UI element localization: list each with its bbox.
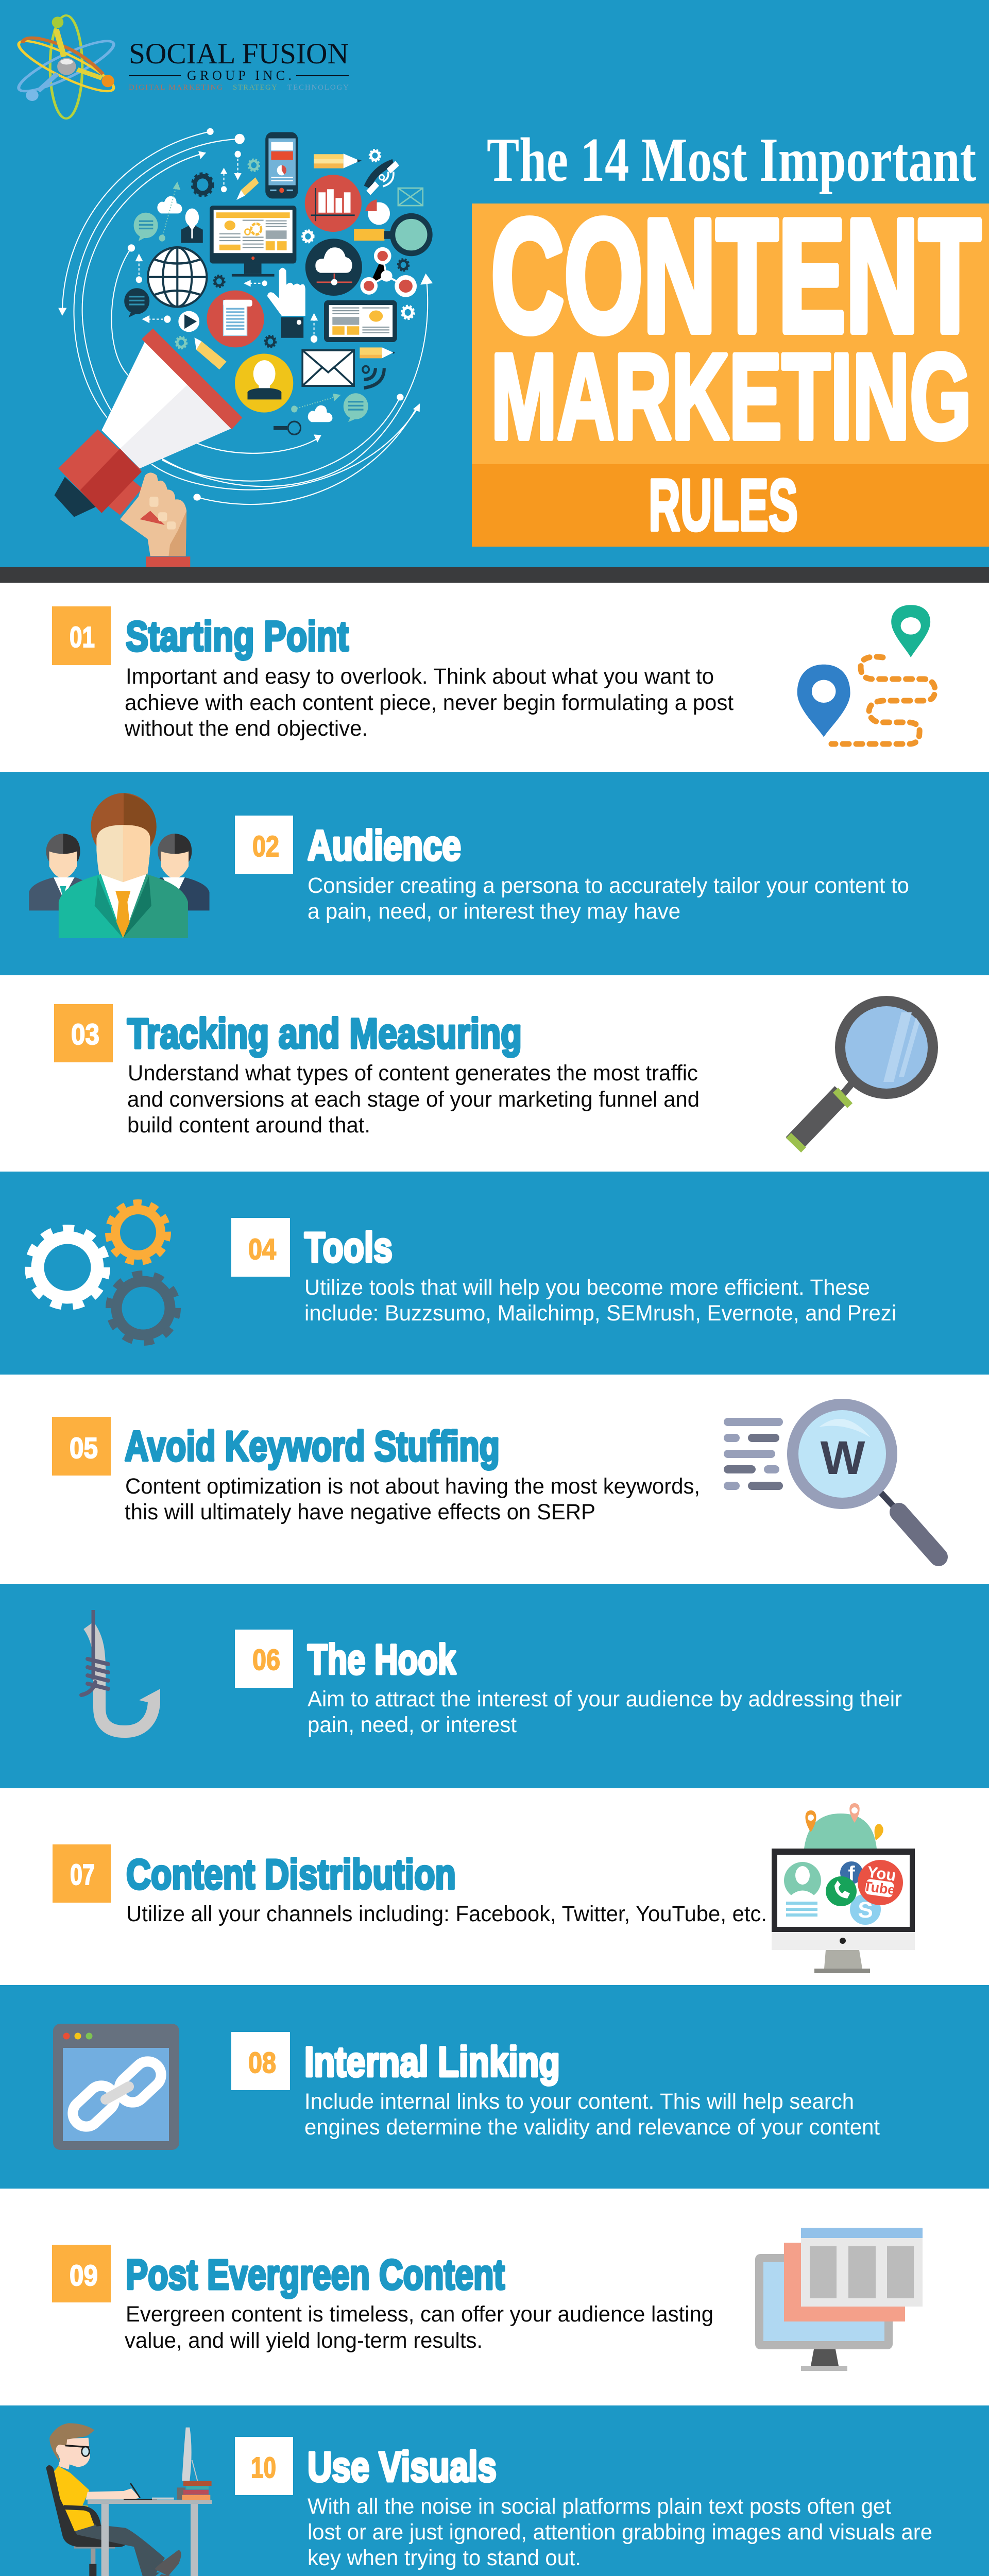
icon: clouds: [157, 196, 332, 422]
panel: rule 03 tracking and measuring: and conversions at each stage of your marketing funnel and: [127, 1087, 700, 1112]
panel: rule 07 content distribution: [0, 1788, 989, 1985]
panel: rule 06 the hook: 06: [252, 1643, 280, 1676]
panel: rule 10 use visuals: key when trying to stand out.: [308, 2546, 581, 2570]
icon: globe: [148, 247, 207, 307]
icon: outline envelope: [398, 188, 423, 206]
icon: magnifying glass: [354, 216, 430, 253]
panel: rule 06 the hook: The Hook: [308, 1636, 456, 1683]
icon: hand holding megaphone: [120, 472, 190, 567]
icon: network nodes: [360, 247, 417, 297]
panel: rule 04 tools: Tools: [304, 1224, 393, 1271]
icon: small magnifier: [274, 421, 301, 434]
title box: [472, 187, 989, 547]
icon: speech bubbles: [124, 213, 368, 422]
icon: gears: [176, 149, 414, 349]
logo: Social Fusion Group: GROUP INC.: [187, 68, 292, 83]
panel: rule 10 use visuals: Use Visuals: [308, 2444, 497, 2490]
panel: rule 02 audience: a pain, need, or interest they may have: [308, 899, 680, 924]
panel: rule 01 starting point: Starting Point: [126, 613, 349, 660]
panel: rule 04 tools: 04: [248, 1233, 276, 1266]
panel: rule 02 audience: [0, 772, 989, 975]
panel: rule 10 use visuals: 10: [251, 2451, 276, 2484]
panel: rule 09 post evergreen content: Evergreen content is timeless, can offer your audience lasting: [126, 2302, 713, 2327]
panel: rule 06 the hook: Aim to attract the interest of your audience by addressing their: [308, 1687, 902, 1711]
panel: rule 03 tracking and measuring: build content around that.: [127, 1113, 370, 1138]
panel: rule 07 content distribution: Utilize all your channels including: Facebook, Twitter, YouTube, etc.: [126, 1902, 767, 1926]
panel: rule 08 internal linking: engines determine the validity and relevance of your content: [304, 2115, 880, 2140]
icon: magnifying glass: [789, 1001, 933, 1150]
icon: small pencil: [360, 347, 395, 358]
panel: header: [0, 0, 989, 567]
panel: rule 05 avoid keyword stuffing: Avoid Keyword Stuffing: [125, 1423, 500, 1470]
panel: rule 06 the hook: [0, 1584, 989, 1788]
panel: rule 03 tracking and measuring: 03: [71, 1018, 99, 1051]
panel: rule 09 post evergreen content: Post Evergreen Content: [126, 2251, 505, 2298]
panel: rule 08 internal linking: [0, 1985, 989, 2189]
panel: rule 03 tracking and measuring: [0, 975, 989, 1172]
icon: monitor with social apps: [772, 1803, 915, 1973]
panel: rule 01 starting point: Important and easy to overlook. Think about what you want to: [126, 664, 714, 689]
icon: keyword magnifier: [724, 1404, 939, 1557]
icon: document circle: [207, 291, 264, 347]
icon: dashed arrows: [135, 151, 341, 413]
logo: Social Fusion Group: SOCIAL FUSION: [129, 38, 349, 70]
icon: phone: [265, 132, 298, 198]
icon: browser window with chain link: [53, 2024, 179, 2150]
panel: rule 06 the hook: pain, need, or interest: [308, 1713, 517, 1737]
icon: gears: [29, 1203, 177, 1342]
icon: map pins and route: [797, 605, 935, 744]
panel: rule 10 use visuals: lost or are just ignored, attention grabbing images and visuals are: [308, 2520, 932, 2545]
icon: audience people: [29, 793, 210, 938]
panel: rule 01 starting point: [0, 583, 989, 772]
panel: rule 09 post evergreen content: [0, 2189, 989, 2405]
panel: rule 01 starting point: 01: [70, 621, 95, 654]
logo: Social Fusion Group: [12, 15, 349, 118]
panel: rule 05 avoid keyword stuffing: Content optimization is not about having the most keywords,: [125, 1474, 700, 1499]
icon: pencil diagonal: [194, 177, 259, 369]
logo: Social Fusion Group: TECHNOLOGY: [287, 83, 349, 92]
icon: monitor with social apps: S: [858, 1897, 873, 1923]
panel: rule 02 audience: 02: [252, 830, 279, 863]
panel: rule 04 tools: Utilize tools that will help you become more efficient. These: [304, 1275, 870, 1300]
logo: Social Fusion Group: STRATEGY: [233, 83, 277, 92]
panel: rule 03 tracking and measuring: Tracking and Measuring: [127, 1010, 522, 1057]
panel: rule 01 starting point: without the end objective.: [124, 716, 368, 741]
panel: rule 05 avoid keyword stuffing: [0, 1375, 989, 1584]
icon: person circle: [235, 353, 293, 413]
panel: rule 03 tracking and measuring: Understand what types of content generates the most traffic: [128, 1061, 698, 1086]
panel: rule 04 tools: [0, 1172, 989, 1375]
panel: rule 09 post evergreen content: 09: [70, 2259, 98, 2292]
logo: Social Fusion Group: DIGITAL MARKETING: [129, 83, 223, 92]
icon: monitor and stacked pages: [755, 2228, 923, 2371]
panel: rule 10 use visuals: With all the noise in social platforms plain text posts often get: [308, 2494, 891, 2519]
icon: monitor with social apps: You: [866, 1862, 897, 1885]
panel: rule 05 avoid keyword stuffing: this will ultimately have negative effects on SERP: [125, 1500, 595, 1524]
icon: envelope: [302, 350, 354, 386]
panel: rule 02 audience: Consider creating a persona to accurately tailor your content to: [308, 873, 909, 898]
icon: pie chart: [365, 199, 390, 225]
icon: cloud network: [305, 239, 362, 296]
panel: rule 02 audience: Audience: [308, 822, 461, 869]
panel: rule 08 internal linking: Include internal links to your content. This will help search: [304, 2089, 854, 2114]
panel: rule 01 starting point: achieve with each content piece, never begin formulating a post: [125, 690, 734, 715]
icon: signal waves: [363, 366, 384, 388]
icon: businessman: [181, 209, 203, 243]
title box: RULES: [649, 464, 798, 546]
icon: monitor with social apps: f: [848, 1862, 855, 1885]
icon: fish hook: [81, 1610, 160, 1732]
panel: rule 08 internal linking: Internal Linking: [304, 2039, 560, 2086]
panel: rule 10 use visuals: [0, 2405, 989, 2576]
panel: rule 05 avoid keyword stuffing: 05: [70, 1432, 98, 1465]
icon: pointing hand: [267, 268, 305, 338]
icon: desktop monitor: [210, 206, 296, 277]
icon: play button: [178, 311, 199, 332]
icon: bar chart circle: [305, 175, 362, 232]
illustration: megaphone with content icons: [55, 128, 433, 567]
panel: rule 07 content distribution: Content Distribution: [126, 1851, 456, 1898]
panel: rule 09 post evergreen content: value, and will yield long-term results.: [125, 2328, 483, 2353]
panel: rule 07 content distribution: 07: [70, 1858, 95, 1891]
icon: tablet: [324, 300, 397, 342]
panel: rule 08 internal linking: 08: [248, 2046, 276, 2079]
icon: megaphone: [55, 329, 242, 517]
icon: pencil: [314, 154, 362, 168]
icon: monitor with social apps: Tube: [862, 1878, 897, 1898]
panel: rule 04 tools: include: Buzzsumo, Mailchimp, SEMrush, Evernote, and Prezi: [304, 1301, 896, 1326]
icon: keyword magnifier: W: [821, 1432, 865, 1484]
icon: man working at desk: [46, 2423, 212, 2576]
icon: telephone: [367, 163, 397, 193]
